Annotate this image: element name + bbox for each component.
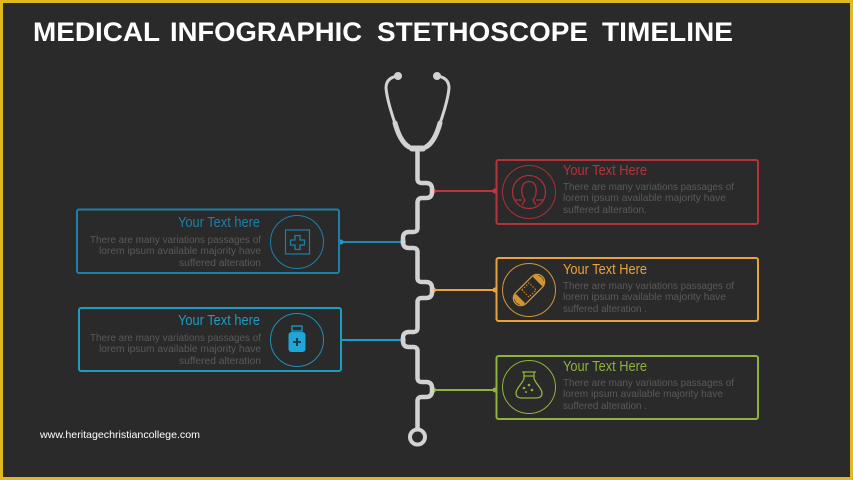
body text: [90, 234, 261, 269]
icon: medicine bottle: [270, 314, 324, 366]
heading: Your Text Here: [563, 163, 647, 179]
stethoscope timeline: [386, 76, 449, 444]
connector: orange: [430, 287, 498, 293]
left ear tip: [394, 72, 402, 80]
panel: blue upper: [77, 210, 339, 273]
body text: lorem ipsum available majority have: [563, 291, 726, 303]
connector: blue lower: [341, 337, 406, 343]
watermark url: www.heritagechristiancollege.com: [39, 429, 200, 441]
right ear tube: [422, 76, 449, 149]
stethoscope tube: [403, 150, 432, 429]
body text: There are many variations passages of: [563, 181, 734, 193]
body text: lorem ipsum available majority have: [563, 388, 723, 400]
body text: There are many variations passages of: [563, 377, 734, 389]
connector: blue upper: [338, 239, 406, 245]
body text: lorem ipsum available majority have: [99, 245, 261, 257]
panel: orange: [496, 258, 758, 321]
icon: bandage: [502, 264, 556, 316]
body text: [563, 377, 734, 412]
panel: blue lower: [79, 308, 341, 371]
body text: suffered alteration .: [563, 400, 647, 412]
heading: Your Text Here: [563, 262, 647, 278]
body text: suffered alteration.: [563, 204, 647, 216]
heading: Your Text here: [178, 215, 260, 231]
body text: [563, 181, 734, 216]
panel: green: [496, 356, 758, 419]
body text: [563, 280, 734, 315]
left ear tube: [386, 76, 413, 149]
icon: flask: [502, 360, 556, 414]
left tube thickening: [395, 123, 409, 147]
icon: medical cross box: [270, 216, 324, 268]
body text: There are many variations passages of: [90, 332, 261, 344]
right ear tip: [433, 72, 441, 80]
yoke: [412, 146, 423, 152]
body text: suffered alteration: [179, 257, 261, 269]
heading: Your Text here: [178, 313, 260, 329]
body text: suffered alteration: [179, 355, 261, 367]
body text: lorem ipsum available majority have: [563, 192, 726, 204]
title: INFOGRAPHIC: [170, 17, 362, 47]
body text: There are many variations passages of: [90, 234, 261, 246]
title: STETHOSCOPE: [377, 17, 588, 47]
heading: Your Text Here: [563, 359, 647, 375]
title: [33, 17, 733, 47]
connector: red: [430, 188, 498, 194]
panel: red: [496, 160, 758, 224]
title: TIMELINE: [602, 17, 733, 47]
body text: lorem ipsum available majority have: [99, 343, 261, 355]
tube end ring: [410, 430, 425, 444]
body text: There are many variations passages of: [563, 280, 734, 292]
body text: suffered alteration .: [563, 303, 647, 315]
right tube thickening: [426, 123, 440, 147]
connector: green: [430, 387, 498, 393]
icon: person: [502, 166, 556, 218]
title: MEDICAL: [33, 17, 160, 47]
body text: [90, 332, 261, 367]
